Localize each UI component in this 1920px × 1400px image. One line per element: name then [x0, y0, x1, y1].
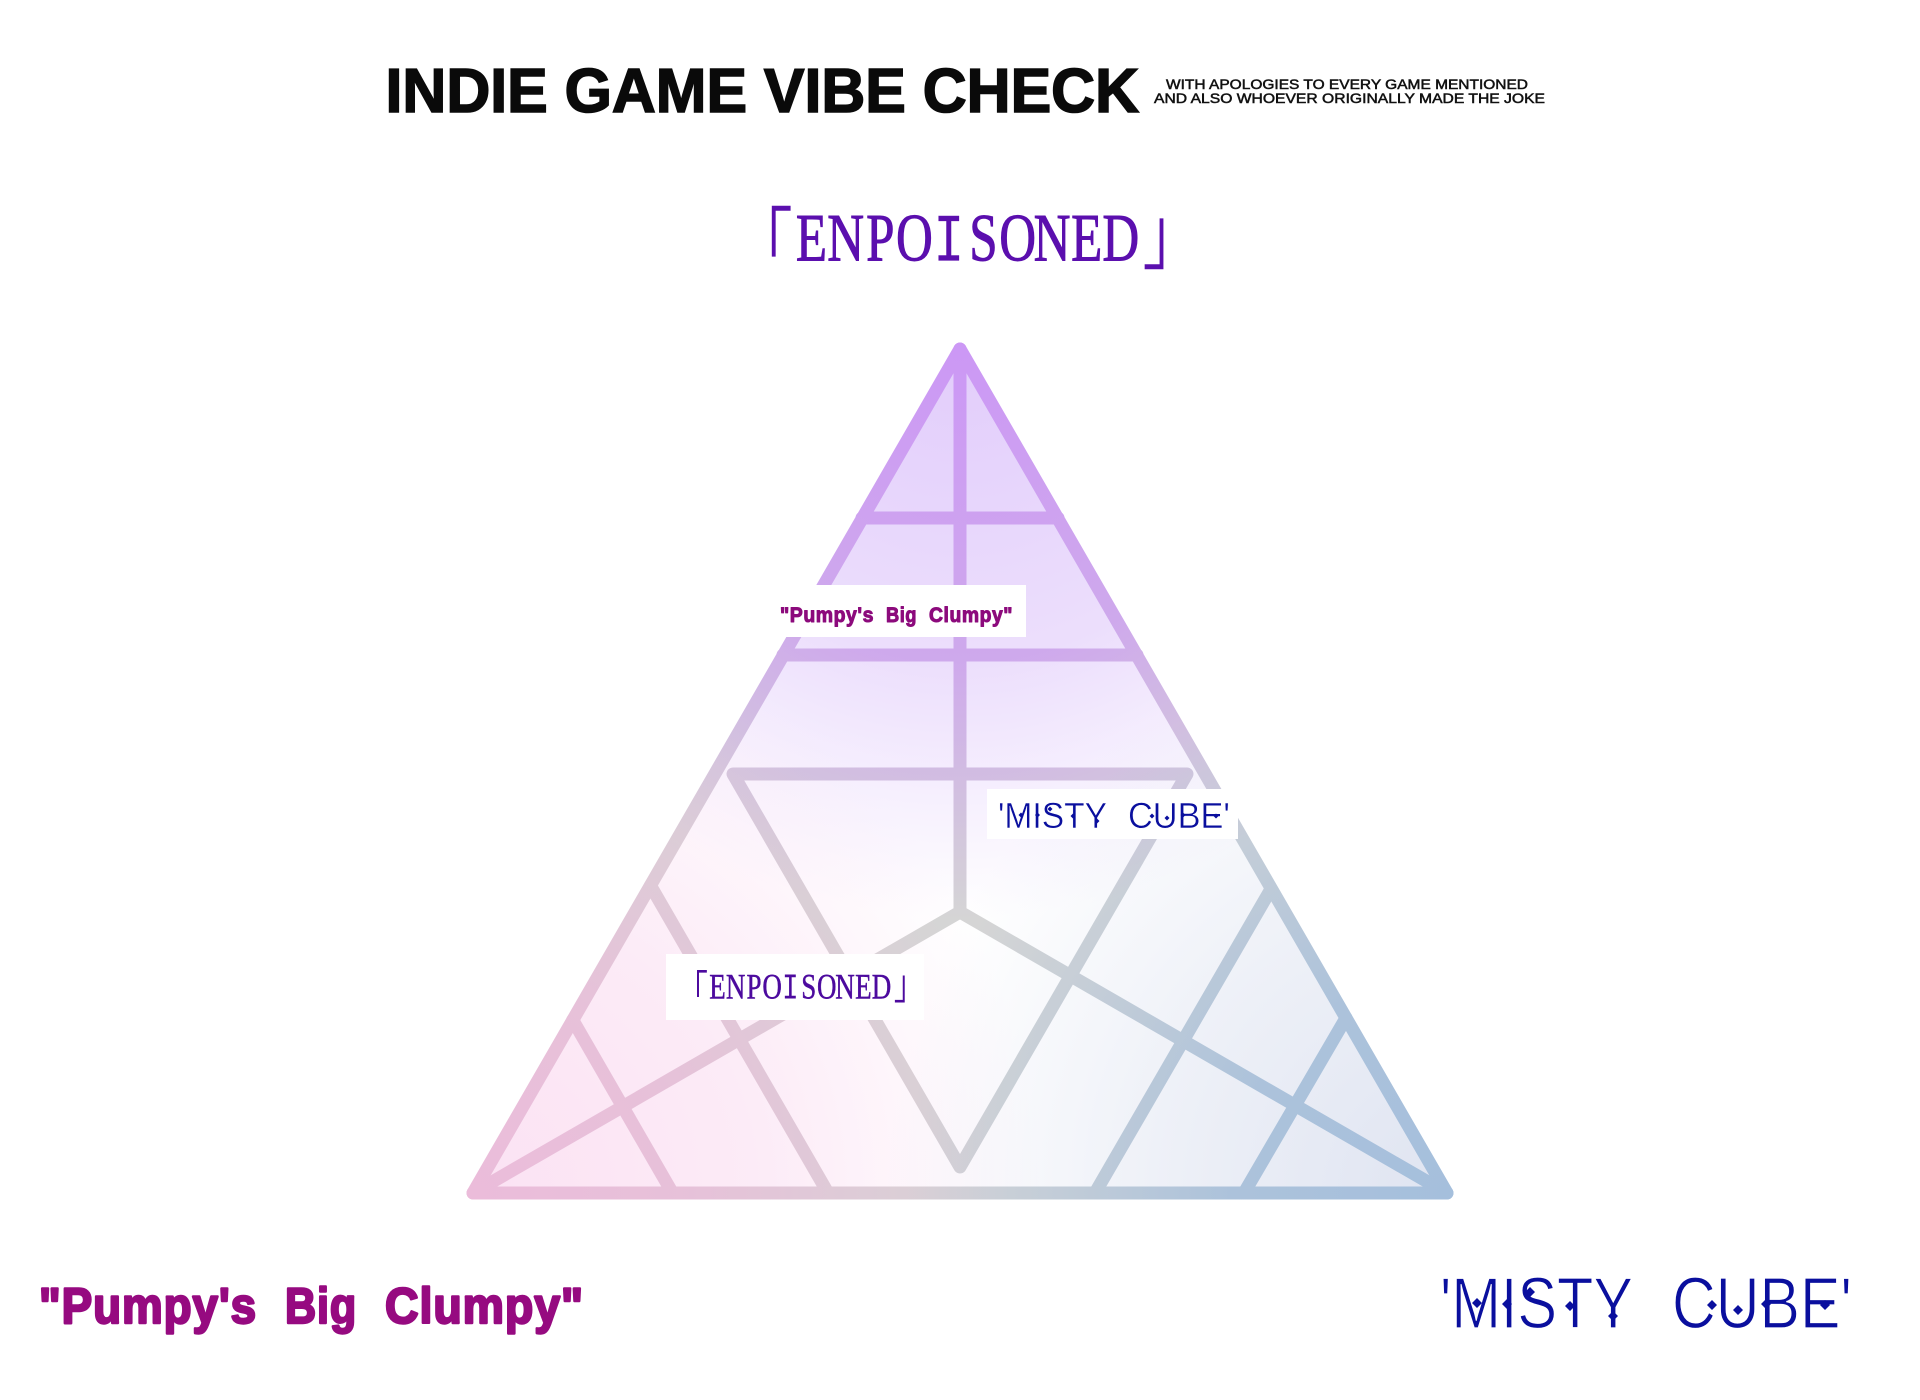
- chip: ENPOISONED: ENPO: [709, 967, 782, 1006]
- triangle chart: [450, 330, 1470, 1210]
- bottom-right vertex label: MISTY CUBE: 'MISTY: [1440, 1264, 1633, 1344]
- chip: MISTY CUBE: CUBE': [1128, 795, 1230, 836]
- bottom-left vertex label: Pumpy's Big Clumpy: "Pumpy's: [39, 1278, 257, 1334]
- chip: ENPOISONED: 「: [678, 970, 708, 1013]
- subtitle note: AND ALSO WHOEVER ORIGINALLY MADE THE JOKE: [1154, 91, 1545, 106]
- chip: ENPOISONED: SONED: [801, 967, 891, 1006]
- chip: ENPOISONED: I: [782, 969, 798, 1010]
- chip: Pumpy's Big Clumpy: Clumpy": [929, 604, 1013, 627]
- chip: Pumpy's Big Clumpy: Big: [886, 604, 917, 627]
- bottom-left vertex label: Pumpy's Big Clumpy: Clumpy": [385, 1278, 584, 1334]
- triangle gradient fill: [491, 374, 1429, 1186]
- chip: ENPOISONED: 」: [894, 964, 924, 1007]
- bottom-left vertex label: Pumpy's Big Clumpy: Big: [285, 1278, 357, 1334]
- chip: Pumpy's Big Clumpy: [766, 585, 1026, 637]
- top vertex label: ENPOISONED: I: [934, 205, 964, 282]
- chip: MISTY CUBE: [987, 789, 1238, 839]
- chip: ENPOISONED: [666, 954, 924, 1020]
- chip: Pumpy's Big Clumpy: "Pumpy's: [780, 604, 874, 627]
- subtitle note: WITH APOLOGIES TO EVERY GAME MENTIONED: [1166, 77, 1528, 92]
- subtitle note: [1154, 77, 1545, 106]
- bottom-right vertex label: MISTY CUBE: CUBE': [1672, 1264, 1852, 1344]
- triangle grid lines: [450, 330, 1470, 1210]
- top vertex label: ENPOISONED: 」: [1144, 197, 1199, 278]
- top vertex label: ENPOISONED: SONED: [969, 200, 1139, 276]
- chip: MISTY CUBE: 'MISTY: [998, 795, 1107, 836]
- top vertex label: ENPOISONED: ENPO: [796, 200, 933, 276]
- title: INDIE GAME VIBE CHECK: [386, 57, 1139, 126]
- bottom-left vertex label: Pumpy's Big Clumpy: [39, 1278, 584, 1334]
- bottom-right vertex label: MISTY CUBE: [1440, 1264, 1852, 1344]
- top vertex label: ENPOISONED: 「: [736, 205, 792, 286]
